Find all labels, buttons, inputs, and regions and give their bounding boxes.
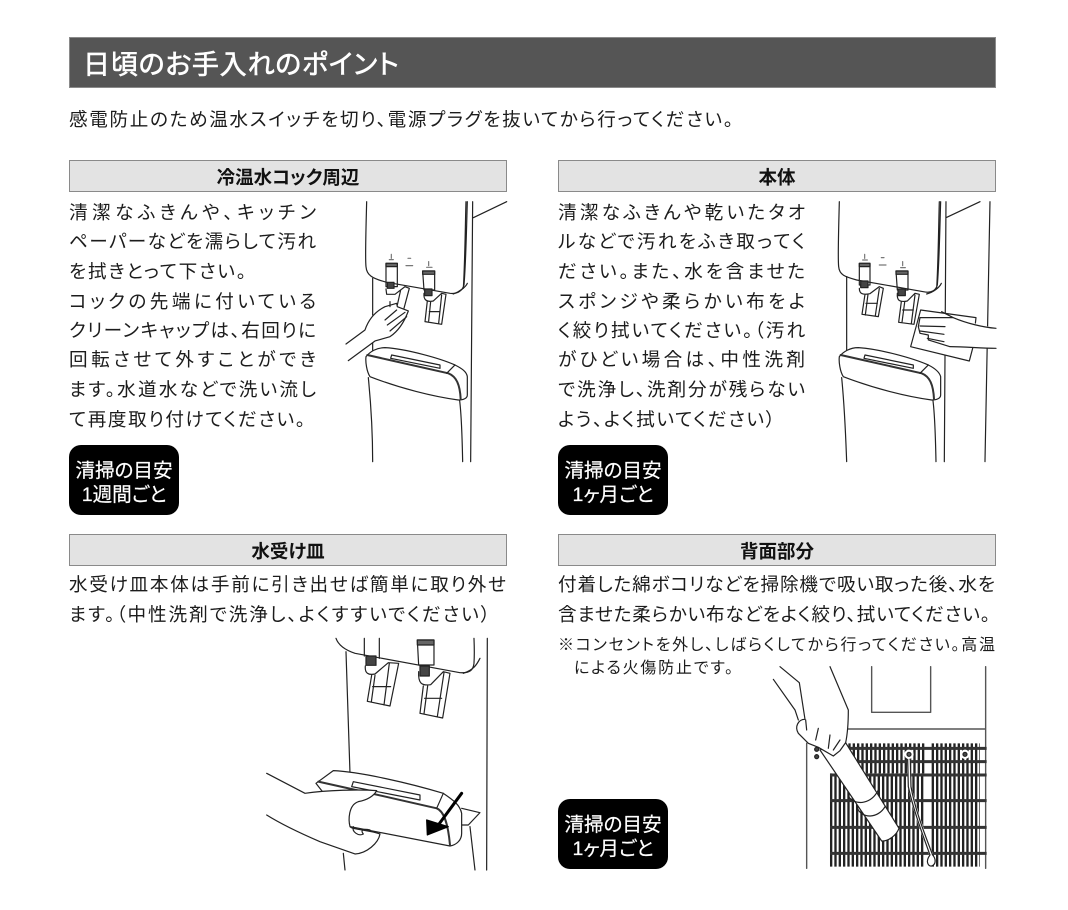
back side text block: 付着した綿ボコリなどを掃除機で吸い取った後、水を (558, 574, 995, 595)
drip tray text block (69, 574, 506, 625)
faucet cleaning badge: 清掃の目安 (75, 460, 173, 482)
body cleaning badge (558, 445, 668, 515)
body text block: 清潔なふきんや乾いたタオ (558, 202, 805, 223)
panel: faucet heading (69, 160, 507, 192)
back side cleaning badge: 1ヶ月ごと (572, 838, 654, 860)
panel: back side heading: 背面部分 (740, 541, 814, 562)
panel: body heading: 本体 (758, 167, 796, 188)
panel: drip tray heading (69, 534, 507, 566)
body text block: ださい。また、水を含ませた (558, 261, 805, 282)
faucet text block: ペーパーなどを濡らして汚れ (69, 231, 316, 252)
faucet text block: 回転させて外すことができ (69, 349, 316, 370)
faucet cleaning badge (69, 445, 179, 515)
body cleaning badge: 1ヶ月ごと (572, 484, 654, 506)
faucet text block: コックの先端に付いている (69, 291, 316, 312)
body text block: よう、よく拭いてください） (558, 409, 775, 430)
faucet cleaning badge: 1週間ごと (82, 484, 166, 506)
body text block: で洗浄し、洗剤分が残らない (558, 379, 805, 400)
faucet text block (69, 202, 316, 430)
back side text block (558, 574, 995, 677)
title bar (69, 37, 996, 88)
arrow: pull out (427, 793, 462, 835)
faucet text block: 清潔なふきんや、キッチン (69, 202, 316, 223)
drip tray text block: 水受け皿本体は手前に引き出せば簡単に取り外せ (69, 574, 506, 595)
body text block: スポンジや柔らかい布をよ (558, 291, 805, 312)
body cleaning badge: 清掃の目安 (564, 460, 662, 482)
back side text block: による火傷防止です。 (574, 660, 733, 677)
back side cleaning badge (558, 799, 668, 869)
body text block: がひどい場合は、中性洗剤 (558, 349, 805, 370)
body text block (558, 202, 805, 430)
back side text block: ※コンセントを外し、しばらくしてから行ってください。高温 (558, 637, 995, 654)
body text block: ルなどで汚れをふき取ってく (558, 231, 805, 252)
panel: drip tray heading: 水受け皿 (251, 541, 325, 562)
panel: faucet heading: 冷温水コック周辺 (217, 167, 359, 188)
faucet text block: を拭きとって下さい。 (69, 261, 246, 282)
panel: body heading (558, 160, 996, 192)
intro text: 感電防止のため温水スイッチを切り、電源プラグを抜いてから行ってください。 (69, 109, 733, 130)
panel: back side heading (558, 534, 996, 566)
faucet text block: ます。水道水などで洗い流し (69, 379, 316, 400)
title bar: 日頃のお手入れのポイント (83, 50, 400, 80)
back side text block: 含ませた柔らかい布などをよく絞り、拭いてください。 (558, 604, 990, 625)
body text block: く絞り拭いてください。（汚れ (558, 320, 805, 341)
back side cleaning badge: 清掃の目安 (564, 814, 662, 836)
faucet text block: クリーンキャップは、右回りに (69, 320, 316, 341)
drip tray text block: ます。（中性洗剤で洗浄し、よくすすいでください） (69, 604, 490, 625)
faucet text block: て再度取り付けてください。 (69, 409, 305, 430)
